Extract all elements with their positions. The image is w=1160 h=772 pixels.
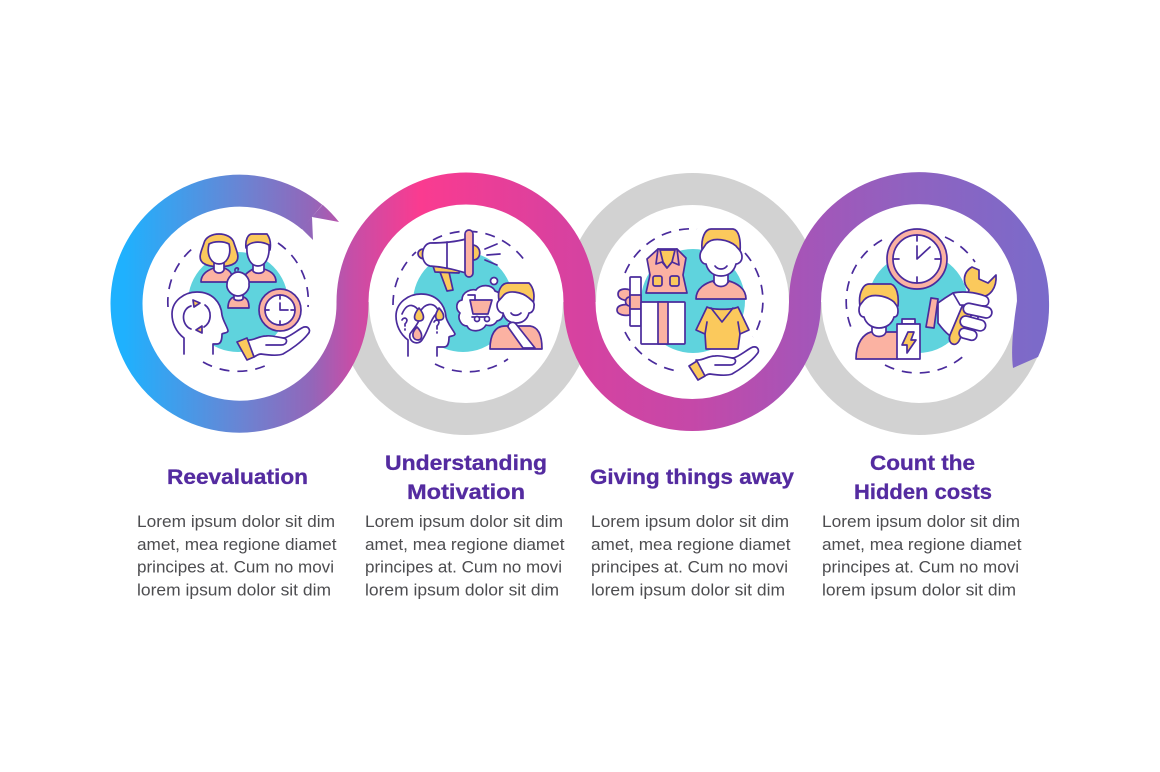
step 1 text bbox=[137, 465, 337, 600]
hand with wrench bbox=[926, 267, 996, 344]
step 2 text bbox=[365, 451, 565, 600]
vest bbox=[646, 249, 687, 293]
body: principes at. Cum no movi bbox=[822, 558, 1019, 577]
heading: Hidden costs bbox=[854, 480, 992, 504]
man bbox=[856, 284, 898, 359]
icon: hidden costs bbox=[846, 229, 996, 373]
man bbox=[696, 229, 746, 299]
body: Lorem ipsum dolor sit dim bbox=[365, 512, 563, 531]
man bbox=[243, 234, 276, 282]
head with tangled thoughts bbox=[396, 294, 455, 356]
head with cycle arrows bbox=[172, 292, 228, 354]
body: principes at. Cum no movi bbox=[591, 558, 788, 577]
baby bbox=[227, 268, 249, 308]
heading: Understanding bbox=[385, 451, 547, 475]
body: lorem ipsum dolor sit dim bbox=[365, 581, 559, 600]
body: lorem ipsum dolor sit dim bbox=[137, 581, 331, 600]
body: amet, mea regione diamet bbox=[365, 535, 565, 554]
heading: Count the bbox=[870, 451, 975, 475]
body: Lorem ipsum dolor sit dim bbox=[137, 512, 335, 531]
heading: Reevaluation bbox=[167, 465, 308, 489]
body: amet, mea regione diamet bbox=[137, 535, 337, 554]
gift box bbox=[617, 277, 685, 344]
body: lorem ipsum dolor sit dim bbox=[591, 581, 785, 600]
heading: Motivation bbox=[407, 480, 525, 504]
body: lorem ipsum dolor sit dim bbox=[822, 581, 1016, 600]
body: Lorem ipsum dolor sit dim bbox=[822, 512, 1020, 531]
body: amet, mea regione diamet bbox=[591, 535, 791, 554]
open hand bbox=[237, 327, 309, 360]
body: amet, mea regione diamet bbox=[822, 535, 1022, 554]
ribbon arrow head bbox=[302, 205, 339, 240]
woman bbox=[200, 234, 238, 282]
body: principes at. Cum no movi bbox=[137, 558, 334, 577]
icon: giving things away bbox=[617, 229, 763, 380]
clock bbox=[259, 289, 301, 331]
megaphone bbox=[418, 230, 500, 291]
ribbon tail end bbox=[1012, 301, 1049, 368]
step 4 text bbox=[822, 451, 1022, 600]
person thinking bbox=[490, 283, 542, 349]
t-shirt bbox=[696, 307, 749, 349]
gradient ribbon bbox=[127, 188, 1049, 417]
heading: Giving things away bbox=[590, 465, 794, 489]
battery bbox=[897, 319, 920, 359]
clock bbox=[887, 229, 947, 289]
open hand bbox=[689, 347, 758, 380]
step 3 text bbox=[590, 465, 794, 600]
icon: reevaluation bbox=[168, 234, 309, 371]
gray ring segments bbox=[353, 189, 1033, 419]
thought bubble with cart bbox=[457, 286, 503, 331]
body: principes at. Cum no movi bbox=[365, 558, 562, 577]
body: Lorem ipsum dolor sit dim bbox=[591, 512, 789, 531]
icon: understanding motivation bbox=[393, 230, 542, 372]
